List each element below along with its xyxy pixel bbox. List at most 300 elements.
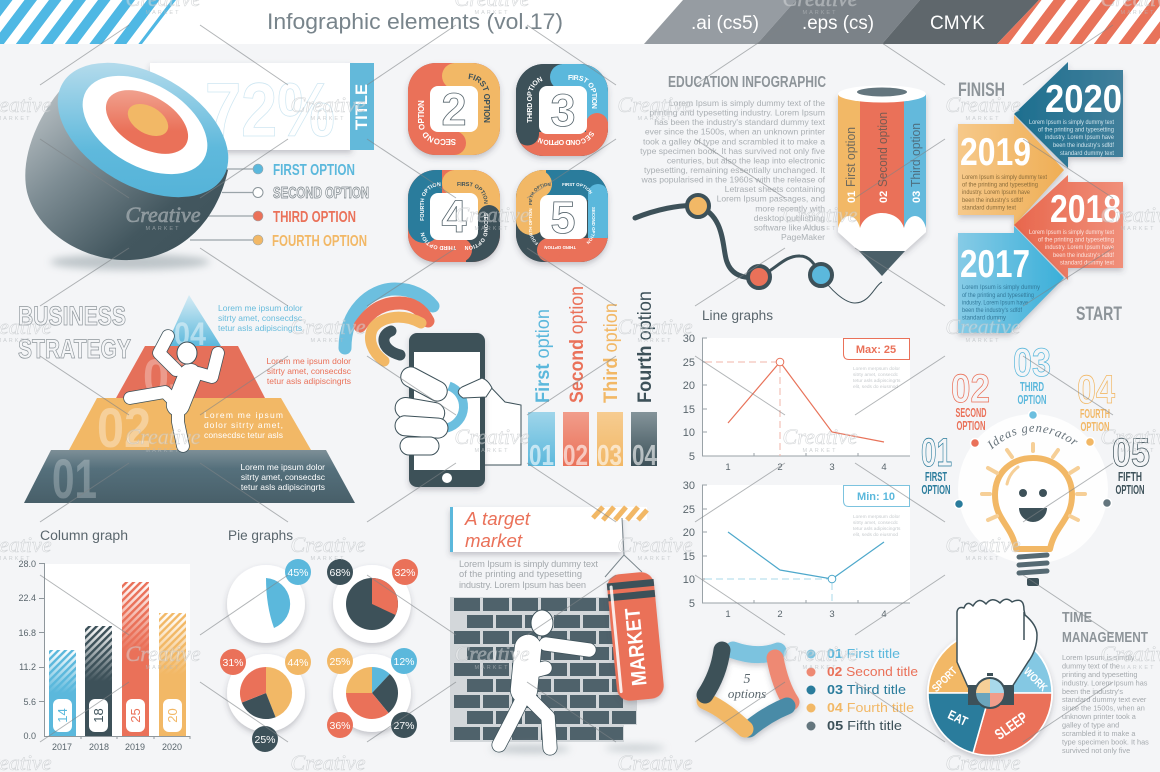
option list: FOURTH OPTION <box>272 233 367 250</box>
watermark: Creative Market repeated: Creative <box>455 641 530 666</box>
column plot area: 22.4 <box>18 593 36 603</box>
time management paragraph: type specimen book. It has <box>1062 737 1149 746</box>
option nodes <box>954 410 1112 508</box>
pie two: 68% <box>329 567 351 579</box>
header: format band cmyk <box>882 0 1039 44</box>
pyramid tier 03: 03 <box>143 349 195 405</box>
option bars: 03 <box>597 440 622 472</box>
column 2019 <box>122 582 149 736</box>
watermark: Creative Market repeated: Creative <box>783 202 858 227</box>
watermark: Creative Market repeated: Creative <box>946 532 1021 557</box>
option labels: OPTION <box>1080 420 1110 434</box>
line chart min: 20 <box>683 527 695 539</box>
line chart max: tetur asls adipiscingrts <box>853 378 901 384</box>
line chart min: 10 <box>683 574 695 586</box>
sector labels: SPORT <box>930 665 960 695</box>
arrow 2019 <box>958 115 1064 226</box>
pyramid tier 03: tetur asls adipiscingrts <box>267 376 351 386</box>
ground shadows <box>490 745 665 753</box>
time management paragraph: dummy text of the <box>1062 662 1120 670</box>
column graph heading: Column graph <box>40 528 128 543</box>
option connector lines <box>190 169 258 240</box>
time management paragraph: scrambled it to make a <box>1062 729 1136 738</box>
line chart max: 30 <box>683 333 695 345</box>
arrow 2018: standard dummy text <box>1060 260 1114 266</box>
panel: five options ring <box>703 646 918 733</box>
min callout <box>844 486 910 506</box>
education paragraph: took a galley of type and scrambled it to make a <box>643 136 825 146</box>
badge: two options <box>404 62 504 162</box>
header: format band ai: .ai (cs5) <box>691 13 759 34</box>
arrow 2018 <box>1014 175 1123 280</box>
education paragraph: desktop publishing <box>754 213 825 223</box>
option labels: OPTION <box>956 419 986 433</box>
pyramid tier 03: sitrty amet, consecdsc <box>267 366 352 376</box>
rotated option labels: First option <box>533 309 554 403</box>
script title: Ideas generator <box>988 426 1078 450</box>
header: title: Infographic elements (vol.17) <box>267 9 563 34</box>
watermark: Creative Market repeated: MARKET <box>1121 665 1155 671</box>
watermark: Creative Market repeated: Creative <box>618 314 693 339</box>
education paragraph: Lorem Ipsum passages, and <box>717 194 825 204</box>
arrow 2020: Lorem Ipsum is simply dummy text <box>1029 120 1114 126</box>
arrow 2020: standard dummy text <box>1060 151 1114 157</box>
pie three <box>220 649 311 752</box>
column 2018: 18 <box>91 708 106 723</box>
watermark: Creative Market repeated: MARKET <box>146 665 180 671</box>
rotated option labels <box>533 286 656 403</box>
line chart min: elit, seds do eiusmod <box>853 532 898 538</box>
five titles legend: 02 Second title <box>827 664 918 679</box>
rotated option labels: Third option <box>601 303 622 403</box>
pyramid tier 01: Lorem me ipsum dolor <box>240 462 325 472</box>
time management paragraph: galley of type and <box>1062 720 1119 730</box>
badge: five options: FOURTH OPTION <box>528 208 538 246</box>
watermark: Creative Market repeated: Creative <box>291 92 366 117</box>
phone <box>409 333 485 487</box>
arrow 2017: Lorem Ipsum is simply dummy <box>962 285 1040 291</box>
option labels <box>922 380 1144 497</box>
punching figure <box>499 610 589 748</box>
arrow 2018: of the printing and typesetting <box>1038 238 1114 244</box>
watermark: Creative Market repeated: MARKET <box>475 10 509 16</box>
option list: SECOND OPTION <box>273 185 369 202</box>
pencil <box>838 86 926 276</box>
line chart min: 4 <box>881 609 887 620</box>
arrow 2017: standard dummy <box>962 316 1006 322</box>
time management paragraph: unknown printer took a <box>1062 712 1137 721</box>
arrow 2020: of the printing and typesetting <box>1038 128 1114 134</box>
education paragraph <box>640 98 826 242</box>
target market paragraph: Lorem Ipsum is simply dummy text <box>459 559 598 569</box>
pyramid tier 02: consecdsc tetur asls <box>204 430 283 440</box>
column 2017: 14 <box>55 708 70 723</box>
sphere shadow <box>50 254 210 270</box>
light bulb <box>982 444 1085 586</box>
watermark: Creative Market repeated: MARKET <box>638 556 672 562</box>
white disc <box>958 414 1108 564</box>
arrow 2019: been the industry's sdfdf <box>962 198 1023 204</box>
option labels: FIRST <box>925 470 947 484</box>
column plot area: 5.6 <box>23 697 36 707</box>
time management heading <box>1062 609 1148 646</box>
target market title card <box>450 507 622 552</box>
pyramid tier 02 <box>69 396 311 459</box>
badge: three options: THIRD OPTION <box>527 76 542 123</box>
target market paragraph: industry. Lorem Ipsum has been <box>459 580 586 590</box>
five titles legend <box>806 646 918 733</box>
watermark: Creative Market repeated: MARKET <box>311 338 345 344</box>
finish label: FINISH <box>958 80 1005 101</box>
arrow 2018: 2018 <box>1050 188 1121 231</box>
column plot area: 2017 <box>52 742 72 752</box>
pyramid tier 01: 01 <box>52 447 97 510</box>
column 2017 <box>49 650 76 736</box>
header: blue stripes <box>0 0 176 44</box>
punching bag <box>605 518 665 702</box>
watermark: Creative Market repeated: MARKET <box>311 556 345 562</box>
pyramid tier 04: Lorem me ipsum dolor <box>218 303 303 313</box>
panel: time management <box>927 599 1149 756</box>
panel: ideas generator <box>921 341 1150 586</box>
pie two <box>327 559 418 643</box>
arrow 2020: 2020 <box>1045 78 1122 121</box>
watermark: Creative Market repeated: MARKET <box>966 338 1000 344</box>
line chart min: 2 <box>777 609 783 620</box>
column plot area: 2018 <box>89 742 109 752</box>
pencil: First option <box>844 127 858 187</box>
pie one: 45% <box>287 567 309 579</box>
arrow 2017: 2017 <box>960 243 1030 286</box>
header: format band eps: .eps (cs) <box>802 13 874 34</box>
education paragraph: was popularised in the 1960s with the release of <box>641 175 826 185</box>
badge: four options: FOURTH OPTION <box>420 182 440 220</box>
option labels: OPTION <box>1018 393 1046 407</box>
pie three: 44% <box>287 657 309 669</box>
pie two: 32% <box>394 567 416 579</box>
pie graphs heading: Pie graphs <box>228 528 293 543</box>
sector labels: SLEEP <box>992 709 1031 744</box>
option list: FIRST OPTION <box>273 162 355 179</box>
arrow 2017 <box>958 226 1064 333</box>
title card <box>150 63 374 153</box>
badge: five options <box>512 170 612 268</box>
max callout: Max: 25 <box>856 344 896 356</box>
line chart max: 5 <box>689 451 695 463</box>
watermark: Creative Market repeated: MARKET <box>475 448 509 454</box>
line chart max: 2 <box>777 462 783 473</box>
start label: START <box>1076 304 1122 325</box>
education paragraph: software like Aldus <box>754 222 825 232</box>
line chart min: Lorem merpsum dolor <box>853 514 900 520</box>
pencil: 01 <box>846 191 858 203</box>
line chart min: 25 <box>683 504 695 516</box>
outlined numbers: 03 <box>1013 341 1051 385</box>
max callout <box>844 338 910 360</box>
fingers and thumb <box>393 363 492 455</box>
outlined numbers: 04 <box>1077 368 1116 412</box>
education heading: EDUCATION INFOGRAPHIC <box>668 74 826 91</box>
arrow 2018: been the industry's sdfdf <box>1053 253 1114 259</box>
five titles legend: 03 Third title <box>827 682 906 697</box>
education paragraph: type specimen book. It has survived not only five <box>640 146 825 156</box>
outlined numbers <box>921 341 1150 475</box>
pyramid tier 01: sitrty amet, consecdsc <box>241 472 326 482</box>
time management paragraph: Lorem Ipsum is simply <box>1062 653 1135 662</box>
watermark: Creative Market repeated: MARKET <box>966 556 1000 562</box>
watermark: Creative Market repeated: MARKET <box>1121 226 1155 232</box>
education paragraph: typesetting, remaining essentially unchanged. It <box>644 165 826 175</box>
column 2020 <box>159 613 186 736</box>
pyramid tier 04: tetur asls adipiscingrts <box>218 323 302 333</box>
arrow 2019: Lorem Ipsum is simply dummy text <box>962 175 1047 181</box>
header: format band ai <box>644 0 796 44</box>
option bars: 01 <box>529 440 554 472</box>
education paragraph: centuries, but also the leap into electronic <box>667 155 826 165</box>
column 2019: 25 <box>128 708 143 723</box>
column plot area <box>18 559 190 752</box>
watermark: Creative Market repeated: Creative <box>455 424 530 449</box>
arrow 2019: of the printing and typesetting <box>962 182 1038 188</box>
education paragraph: printing and typesetting industry. Lorem Ipsum <box>649 108 825 118</box>
line chart min: 15 <box>683 551 695 563</box>
pie four <box>327 648 417 738</box>
five titles legend: 04 Fourth title <box>827 700 914 715</box>
line chart max: 15 <box>683 404 695 416</box>
sphere face rings <box>34 35 252 225</box>
arrow 2017: industry. Lorem Ipsum have <box>962 300 1029 306</box>
option labels: FIFTH <box>1118 470 1142 484</box>
watermark: Creative Market repeated: MARKET <box>475 665 509 671</box>
panel: target sphere <box>25 35 374 270</box>
badge: two options: SECOND OPTION <box>418 100 456 145</box>
badge: two options: FIRST OPTION <box>468 74 490 122</box>
ring caption: options <box>728 686 766 701</box>
option list: THIRD OPTION <box>273 209 356 226</box>
panel: pie graphs <box>220 528 418 752</box>
rotated option labels: Second option <box>567 286 588 403</box>
line chart max: Lorem merpsum dolor <box>853 366 900 372</box>
signal arcs <box>345 289 433 361</box>
panel: smartphone options <box>345 286 657 487</box>
pyramid tier 03 <box>116 346 352 405</box>
target market title card: market <box>465 531 523 551</box>
header: format band eps <box>757 0 920 44</box>
pyramid tier 01 <box>24 447 355 510</box>
option labels: FOURTH <box>1080 407 1110 421</box>
watermark: Creative Market repeated: Creative <box>618 92 693 117</box>
arrow 2017: of the printing and typesetting <box>962 293 1034 299</box>
option labels: THIRD <box>1020 380 1044 394</box>
option labels: OPTION <box>922 483 950 497</box>
pie four: 25% <box>329 656 351 668</box>
winding path with nodes <box>635 195 882 303</box>
watermark: Creative Market repeated: MARKET <box>803 448 837 454</box>
column plot area: 2019 <box>125 742 145 752</box>
fist and watch <box>957 599 1037 707</box>
pyramid tier 04: 04 <box>174 316 206 352</box>
pie three: 31% <box>222 657 244 669</box>
education paragraph: more recently with <box>755 203 825 213</box>
punching bag: MARKET <box>621 607 652 687</box>
time management paragraph: since the 1500s, when an <box>1062 704 1145 713</box>
column plot area: 16.8 <box>18 628 36 638</box>
badge: five options: FIRST OPTION <box>562 183 592 194</box>
badge: three options: 3 <box>550 85 576 136</box>
watermark: Creative Market repeated: MARKET <box>1121 448 1155 454</box>
watermark: Creative Market repeated: Creative <box>455 202 530 227</box>
pyramid tier 01: tetur asls adipiscingrts <box>241 482 325 492</box>
time management paragraph: been the industry's <box>1062 687 1123 696</box>
sector labels <box>930 665 1049 744</box>
rotated option labels: Fourth option <box>635 291 656 403</box>
five titles legend: 01 First title <box>827 646 900 661</box>
arrow 2018: Lorem Ipsum is simply dummy text <box>1029 230 1114 236</box>
title card: 72% <box>205 68 335 153</box>
panel: line graphs <box>683 308 910 620</box>
panel: column graph <box>18 528 190 752</box>
line chart min: 5 <box>689 598 695 610</box>
time management heading: TIME <box>1062 609 1092 626</box>
back of hand <box>470 378 521 465</box>
pencil: 03 <box>911 191 923 203</box>
watermark: Creative Market repeated: Creative <box>291 314 366 339</box>
pyramid tier 02: dolor sitrty amet, <box>204 420 283 430</box>
panel: target market <box>450 507 665 753</box>
header: format band cmyk: CMYK <box>930 13 985 34</box>
title card: TITLE <box>352 84 371 130</box>
arrow 2019: industry. Lorem Ipsum have <box>962 190 1031 196</box>
badge: three options <box>512 64 612 162</box>
option bars: 02 <box>563 440 588 472</box>
arrow 2019: 2019 <box>960 131 1031 174</box>
badge: five options: FIFTH OPTION <box>529 183 550 205</box>
header strip <box>0 0 1160 44</box>
column 2020: 20 <box>165 708 180 723</box>
watermark: Creative Market repeated: MARKET <box>146 226 180 232</box>
watermark: Creative Market repeated: Creative <box>783 424 858 449</box>
time management paragraph <box>1062 653 1149 755</box>
column plot area: 28.0 <box>18 559 36 569</box>
watermark: Creative Market repeated: Creative <box>126 424 201 449</box>
arrow 2020 <box>1014 62 1123 168</box>
pie four: 36% <box>329 720 351 732</box>
line chart max: sitrty amet, consecdc <box>853 372 899 378</box>
line chart min: sitrty amet, consecdc <box>853 520 899 526</box>
line chart max: 20 <box>683 380 695 392</box>
header: red stripes <box>997 0 1160 44</box>
badge: four options <box>404 170 504 268</box>
pyramid tier 03: Lorem me ipsum dolor <box>266 356 351 366</box>
arrow 2019: standard dummy text <box>962 206 1016 212</box>
watermark: Creative Market repeated: MARKET <box>803 226 837 232</box>
watermark: Creative Market repeated: Creative <box>126 641 201 666</box>
arrow 2018: industry. Lorem Ipsum have <box>1045 245 1115 251</box>
education paragraph: has been the industry's standard dummy text <box>654 117 826 127</box>
badge: five options: THIRD OPTION <box>544 246 576 250</box>
column 2018 <box>85 626 112 736</box>
column plot area: 11.2 <box>19 662 36 672</box>
business strategy heading: BUSINESS <box>18 301 126 331</box>
badge: three options: FIRST OPTION <box>568 75 597 108</box>
watermark: Creative Market repeated: MARKET <box>475 226 509 232</box>
option list <box>253 162 369 250</box>
badge: four options: SECOND OPTION <box>464 213 488 250</box>
education paragraph: PageMaker <box>781 232 825 242</box>
ring segments <box>705 650 791 729</box>
watermark: Creative Market repeated: Creative <box>946 92 1021 117</box>
target market paragraph <box>459 559 598 590</box>
line chart max: 3 <box>829 462 835 473</box>
target market title card: A target <box>464 509 531 529</box>
sphere body <box>25 88 228 260</box>
watermark: Creative Market repeated: MARKET <box>146 448 180 454</box>
sector labels: EAT <box>946 707 970 729</box>
line chart min: 30 <box>683 480 695 492</box>
arrow 2020: been the industry's sdfdf <box>1053 143 1114 149</box>
watermark: Creative Market repeated: Creative <box>126 202 201 227</box>
business strategy heading: STRATEGY <box>18 334 131 364</box>
line chart min: 1 <box>725 609 731 620</box>
pyramid tier 04: sitrty amet, consecdsc <box>218 313 303 323</box>
option bars <box>528 412 657 472</box>
watermark: Creative Market repeated: MARKET <box>311 116 345 122</box>
badge: two options: 2 <box>441 84 467 135</box>
watermark: Creative Market repeated: MARKET <box>146 10 180 16</box>
option bars: 04 <box>632 440 657 472</box>
arrow 2020: industry. Lorem Ipsum have <box>1045 135 1115 141</box>
watermark: Creative Market repeated: MARKET <box>1121 10 1155 16</box>
line graphs heading: Line graphs <box>702 308 773 323</box>
brick wall <box>450 597 637 742</box>
target market paragraph: of the printing and typesetting <box>459 569 582 579</box>
panel: business strategy pyramid <box>18 295 355 510</box>
time management paragraph: industry. Lorem Ipsum has <box>1062 678 1148 687</box>
badge: four options: THIRD OPTION <box>420 232 456 250</box>
education paragraph: Letraset sheets containing <box>725 184 825 194</box>
time management paragraph: survived not only five <box>1062 746 1130 755</box>
watermark: Creative Market repeated: Creative <box>783 641 858 666</box>
pyramid tier 02: Lorem me ipsum <box>204 410 283 420</box>
column plot area: 2020 <box>162 742 182 752</box>
ring inner panel <box>703 648 794 732</box>
line chart max: 25 <box>683 357 695 369</box>
panel: timeline arrows <box>958 62 1123 333</box>
pencil: 02 <box>878 191 890 203</box>
column plot area: 0.0 <box>23 731 36 741</box>
badge: five options: SECOND OPTION <box>586 207 596 244</box>
business strategy heading <box>18 301 131 364</box>
arrow 2017: been the industry's sdfdf <box>962 308 1022 314</box>
watermark: Creative Market repeated: Creative <box>291 532 366 557</box>
line chart max: 10 <box>683 427 695 439</box>
pyramid tier 04 <box>166 295 303 352</box>
education paragraph: Lorem Ipsum is simply dummy text of the <box>669 98 825 108</box>
badge: three options: SECOND OPTION <box>538 132 594 145</box>
watermark: Creative Market repeated: MARKET <box>966 116 1000 122</box>
time management paragraph: standard dummy text ever <box>1062 695 1147 704</box>
pencil: Second option <box>875 112 890 187</box>
sector labels: WORK <box>1021 666 1049 694</box>
outlined numbers: 05 <box>1112 431 1150 475</box>
pie four: 12% <box>393 656 415 668</box>
option labels: SECOND <box>956 406 986 420</box>
five titles legend: 05 Fifth title <box>827 718 902 733</box>
line chart max: 1 <box>725 462 731 473</box>
badge: four options: FIRST OPTION <box>457 182 488 204</box>
watermark: Creative Market repeated: MARKET <box>803 665 837 671</box>
line chart max: 4 <box>881 462 887 473</box>
